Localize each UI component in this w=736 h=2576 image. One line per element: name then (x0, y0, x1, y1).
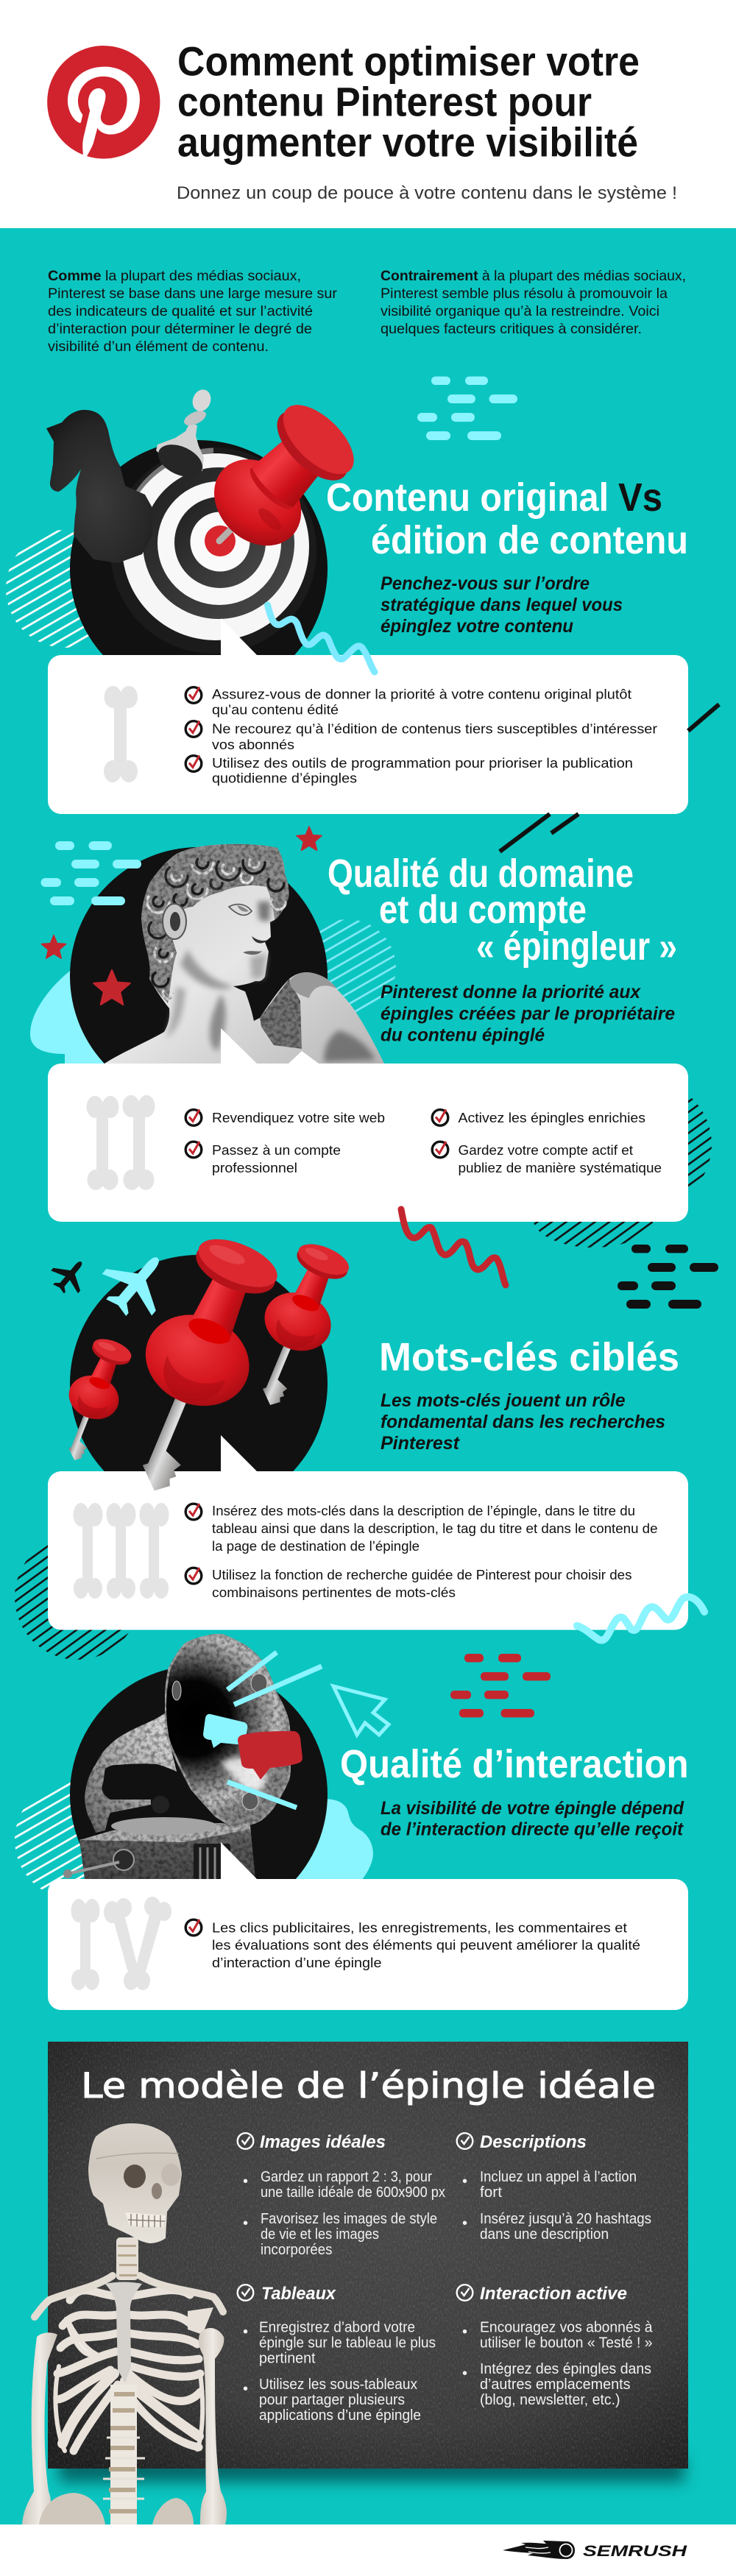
block: Images idéales: Gardez un rapport 2 : 3, pour (261, 2169, 432, 2185)
block: Tableaux: Utilisez les sous-tableaux (259, 2377, 417, 2393)
heading section 2: « épingleur » (476, 924, 677, 969)
checklist section 4: Les clics publicitaires, les enregistrements, les commentaires et (212, 1919, 628, 1936)
needle (219, 527, 233, 541)
pelvis (39, 2493, 194, 2524)
block: Descriptions: Insérez jusqu’à 20 hashtags (480, 2211, 651, 2227)
icon: bone numeral II (87, 1095, 155, 1190)
intro text: left column: Comme la plupart des médias sociaux, (48, 268, 301, 284)
target board (110, 447, 316, 654)
footer white strip (0, 2524, 736, 2576)
icon: bone numeral III (74, 1503, 169, 1599)
image: skeleton (22, 2123, 227, 2524)
checklist section 1: Assurez-vous de donner la priorité à votre contenu original plutôt (212, 687, 632, 702)
checklist section 2: Revendiquez votre site web (212, 1110, 385, 1125)
checklist section 2 (185, 1110, 662, 1175)
decoration: red dashes section 4 (450, 1654, 551, 1718)
decoration: black hatch bottom left (15, 1535, 140, 1660)
icon: black plane (45, 1250, 95, 1301)
decoration: white hatch section 4 (15, 1781, 132, 1899)
block: Interaction active: utiliser le bouton « Testé ! » (480, 2335, 652, 2351)
horn rivets (172, 1674, 267, 1810)
block: Tableaux: pertinent (259, 2351, 316, 2367)
blackboard shadow (59, 2457, 684, 2482)
subheading section 3: fondamental dans les recherches (381, 1412, 665, 1432)
icon: cyan plane (91, 1237, 183, 1328)
checklist section 1: Ne recourez qu’à l’édition de contenus tiers susceptibles d’intéresser (212, 721, 657, 737)
white notch near hand (289, 1051, 319, 1064)
card 4 (48, 1842, 688, 2010)
checklist section 1 (185, 687, 657, 786)
block: Tableaux: pour partager plusieurs (259, 2392, 405, 2408)
crank knob (63, 1850, 134, 1878)
decoration: black disc section 1 (70, 440, 328, 698)
rib cage (55, 2290, 202, 2451)
checklist section 2: Activez les épingles enrichies (458, 1110, 645, 1125)
decoration: black hatch section 2 right (584, 1080, 712, 1209)
title: augmenter votre visibilité (177, 118, 638, 165)
block: Descriptions: dans une description (480, 2226, 609, 2243)
block: Interaction active: Interaction active (480, 2284, 627, 2304)
card 2 (48, 1028, 688, 1222)
clavicles (35, 2276, 223, 2317)
decoration: cyan blob section 2 (30, 963, 118, 1067)
decoration: cyan squiggle section 3 (577, 1597, 704, 1641)
red pin (197, 390, 368, 563)
subtitle: Donnez un coup de pouce à votre contenu dans le système ! (177, 183, 677, 203)
card 3 (48, 1435, 688, 1630)
image: gramophone (63, 1634, 291, 1879)
decoration: black disc section 2 (70, 847, 328, 1105)
horn highlight (221, 1758, 265, 1792)
intro text: left column: visibilité d’un élément de contenu. (48, 339, 269, 355)
heading section 1: Contenu original (326, 475, 609, 520)
decoration: black disc section 3 (70, 1255, 328, 1512)
chess pawn (153, 387, 213, 484)
hand (260, 972, 375, 1062)
hair (141, 844, 289, 1003)
neck vertebrae (116, 2237, 138, 2280)
heading section 1: Vs (618, 475, 662, 520)
block: Images idéales: Favorisez les images de style (261, 2211, 437, 2227)
checklist section 1: quotidienne d’épingles (212, 770, 357, 786)
checklist section 2: Passez à un compte (212, 1142, 341, 1158)
card 1 (48, 618, 688, 814)
panel: blackboard (48, 2042, 688, 2469)
checklist section 1: Utilisez des outils de programmation pour prioriser la publication (212, 755, 633, 771)
subheading section 1: épinglez votre contenu (381, 616, 573, 637)
humerus right (199, 2328, 227, 2524)
icon: cyan cursor arrow (333, 1686, 389, 1735)
decoration: cyan dashes section 1 (417, 377, 517, 440)
block: Tableaux: Enregistrez d’abord votre (259, 2320, 415, 2336)
block: Descriptions: • (462, 2215, 467, 2232)
block: Descriptions (457, 2132, 651, 2243)
ear (163, 904, 186, 939)
heading section 1 (326, 475, 688, 562)
checklist section 2: publiez de manière systématique (458, 1160, 662, 1175)
icon: bone numeral IV (71, 1897, 171, 1990)
spine (103, 2385, 145, 2524)
statue soft shadows (166, 902, 271, 1051)
block: Images idéales (238, 2132, 445, 2258)
block: Tableaux: • (243, 2381, 248, 2397)
block: Images idéales: incorporées (261, 2242, 333, 2258)
checklist section 3: combinaisons pertinentes de mots-clés (212, 1585, 456, 1600)
image: red pins with keys (46, 1225, 360, 1507)
checklist section 4: les évaluations sont des éléments qui peuvent améliorer la qualité (212, 1937, 640, 1953)
block: Images idéales: une taille idéale de 600x900 px (261, 2184, 445, 2201)
logo wordmark: SEMRUSH (583, 2543, 687, 2560)
block: Tableaux: applications d’une épingle (259, 2407, 421, 2424)
heading section 2 (328, 852, 677, 969)
decoration: black strokes (500, 704, 719, 852)
checklist section 2: professionnel (212, 1160, 297, 1175)
subheading section 3: Pinterest (381, 1433, 461, 1454)
block: Tableaux: • (243, 2324, 248, 2340)
block: Descriptions: Descriptions (480, 2132, 587, 2152)
checklist section 4 (185, 1919, 640, 1970)
subheading section 1: Penchez-vous sur l’ordre (381, 573, 590, 594)
subheading section 3: Les mots-clés jouent un rôle (381, 1390, 626, 1411)
block: Tableaux (238, 2284, 436, 2424)
block: Interaction active: • (462, 2324, 467, 2340)
image: target with chess pieces and red pin (46, 387, 368, 654)
icon: bone numeral I (104, 686, 138, 782)
decoration: cyan hatch section 2 (299, 919, 396, 1016)
block: Interaction active: (blog, newsletter, etc.) (480, 2392, 620, 2408)
heading section 1: édition de contenu (371, 518, 688, 562)
title (177, 38, 640, 165)
subheading section 1 (381, 573, 623, 637)
intro text: right column: Pinterest semble plus résolu à promouvoir la (381, 286, 668, 302)
decoration: black disc section 4 (70, 1666, 328, 1923)
heading section 3: Mots-clés ciblés (379, 1335, 679, 1379)
skull (88, 2123, 182, 2243)
subheading section 2: du contenu épinglé (381, 1025, 545, 1046)
sternum (105, 2282, 142, 2383)
intro text: left column: des indicateurs de qualité et sur l’activité (48, 303, 313, 319)
platter (111, 1817, 217, 1835)
decoration: black hatch below card 2 (533, 1189, 654, 1248)
block: Interaction active: d’autres emplacements (480, 2377, 630, 2393)
checklist section 3: Utilisez la fonction de recherche guidée de Pinterest pour choisir des (212, 1567, 631, 1582)
logo flame (503, 2541, 575, 2559)
intro text: right column: Contrairement à la plupart des médias sociaux, (381, 268, 686, 284)
checklist section 3: tableau ainsi que dans la description, le tag du titre et dans le contenu de (212, 1521, 658, 1536)
block: Tableaux: Tableaux (261, 2284, 336, 2304)
heading section 2: et du compte (379, 888, 587, 932)
block: Interaction active: Encouragez vos abonnés à (480, 2320, 653, 2336)
decoration: red squiggle (401, 1209, 506, 1285)
block: Interaction active: • (462, 2366, 467, 2382)
block: Descriptions: • (462, 2173, 467, 2190)
decoration: cyan dashes section 2 (41, 841, 141, 905)
scapula right (188, 2307, 213, 2335)
block: Images idéales: Images idéales (260, 2132, 386, 2152)
cabinet grille (194, 1844, 230, 1879)
face details (229, 905, 269, 955)
block: Images idéales: de vie et les images (261, 2226, 379, 2243)
block: Descriptions: Incluez un appel à l’action (480, 2169, 637, 2185)
blackboard title: Le modèle de l’épingle idéale (81, 2066, 656, 2106)
intro text: right column: quelques facteurs critiques à considérer. (381, 321, 642, 337)
intro text: left column: Pinterest se base dans une large mesure sur (48, 286, 337, 302)
block: Interaction active (457, 2284, 653, 2408)
heading section 4: Qualité d’interaction (340, 1742, 689, 1786)
sound box (152, 1796, 169, 1814)
chess knight (46, 410, 152, 563)
intro text: right column: visibilité organique qu’à la restreindre. Voici (381, 303, 659, 319)
statue silhouette (105, 844, 384, 1064)
image: David statue (105, 844, 384, 1064)
block: Images idéales: • (243, 2173, 248, 2190)
gramophone cabinet (79, 1823, 255, 1879)
checklist section 2: Gardez votre compte actif et (458, 1142, 634, 1158)
subheading section 3 (381, 1390, 665, 1454)
intro text: right column (381, 268, 686, 337)
icon: red speech bubble (238, 1731, 302, 1780)
icon: Pinterest logo (47, 46, 160, 159)
block: Images idéales: • (243, 2215, 248, 2232)
subheading section 4 (381, 1798, 684, 1840)
icon: cyan speech bubble (203, 1714, 247, 1748)
subheading section 2: Pinterest donne la priorité aux (381, 982, 641, 1002)
intro text: left column: d’interaction pour déterminer le degré de (48, 321, 312, 337)
checklist section 3 (185, 1503, 657, 1600)
intro text: left column (48, 268, 337, 355)
subheading section 2: épingles créées par le propriétaire (381, 1004, 675, 1025)
horn bell (165, 1634, 291, 1827)
checklist section 3: Insérez des mots-clés dans la description de l’épingle, dans le titre du (212, 1503, 635, 1518)
subheading section 1: stratégique dans lequel vous (381, 595, 623, 615)
logo: SEMrush (503, 2541, 687, 2560)
decoration: white hatch section 1 (6, 530, 124, 648)
decoration: cyan squiggle section 1 (268, 605, 375, 672)
decoration: cyan sound lines (227, 1652, 322, 1808)
decoration: cyan blob section 4 (287, 1800, 373, 1884)
subheading section 4: La visibilité de votre épingle dépend (381, 1798, 684, 1819)
title: contenu Pinterest pour (177, 79, 592, 125)
heading section 2: Qualité du domaine (328, 852, 634, 896)
checklist section 1: qu’au contenu édité (212, 702, 339, 717)
checklist section 4: d’interaction d’une épingle (212, 1955, 381, 1970)
decoration: red stars (41, 827, 322, 1005)
horn neck and arm (85, 1713, 177, 1833)
block: Tableaux: épingle sur le tableau le plus (259, 2335, 436, 2351)
block: Descriptions: fort (480, 2184, 502, 2201)
block: Interaction active: Intégrez des épingles dans (480, 2361, 651, 2377)
subheading section 2 (381, 982, 675, 1046)
humerus left (22, 2332, 57, 2524)
checklist section 1: vos abonnés (212, 737, 294, 752)
decoration: black dashes section 3 (618, 1245, 718, 1309)
title: Comment optimiser votre (177, 38, 640, 85)
subheading section 4: de l’interaction directe qu’elle reçoit (381, 1819, 684, 1840)
checklist section 3: la page de destination de l’épingle (212, 1538, 420, 1554)
